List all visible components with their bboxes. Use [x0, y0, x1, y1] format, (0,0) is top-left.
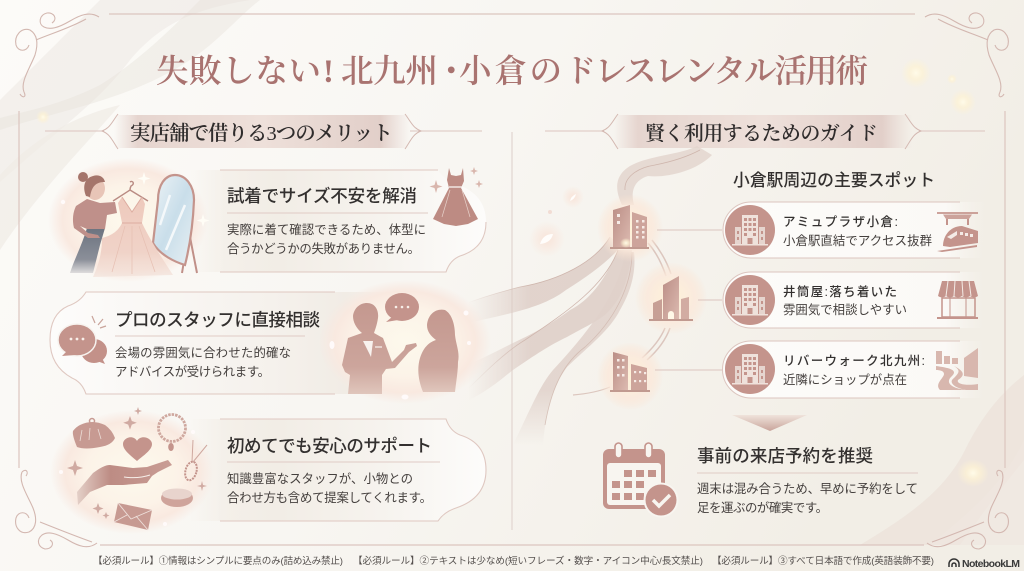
- logo: NotebookLM: NotebookLM: [962, 558, 1020, 570]
- icon: dress: [430, 167, 483, 226]
- heading: main spots: 小倉駅周辺の主要スポット: [733, 171, 935, 190]
- heading: right section: 賢く利用するためのガイド: [645, 122, 878, 145]
- panel: card 3 beginner support: [50, 407, 486, 534]
- spot: Amu Plaza Kokura: 小倉駅直結でアクセス抜群: [783, 233, 932, 248]
- spot: Izutsuya: 井筒屋:落ち着いた: [783, 284, 897, 299]
- heading: left section: 実店舗で借りる3つのメリット: [130, 121, 393, 145]
- icon: building 2: [635, 262, 707, 334]
- illustration: woman with dress and mirror: [48, 158, 210, 282]
- spot: Izutsuya: 雰囲気で相談しやすい: [783, 302, 907, 317]
- title: ドレスレンタル活用術: [564, 53, 868, 90]
- footer rules: 【必須ルール】③すべて日本語で作成(英語装飾不要): [712, 555, 934, 567]
- title: [156, 53, 868, 90]
- text: staff detail: 会場の雰囲気に合わせた的確な: [115, 345, 291, 360]
- icon: river and buildings: [936, 348, 978, 390]
- text: size detail: 実際に着て確認できるため、体型に: [227, 222, 426, 237]
- spot: Izutsuya: [723, 272, 985, 328]
- text: reservation detail: 週末は混み合うため、早めに予約をして: [697, 481, 918, 496]
- text: size detail: [227, 222, 426, 256]
- text: support detail: 合わせ方も含めて提案してくれます。: [227, 490, 432, 505]
- ornament: bottom right corner: [927, 470, 1008, 549]
- text: support detail: [227, 471, 432, 505]
- text: staff detail: アドバイスが受けられます。: [115, 364, 270, 379]
- ornament: top right corner: [925, 13, 1008, 97]
- spot: Riverwalk Kitakyushu: リバーウォーク北九州:: [783, 354, 925, 368]
- panel: card 2 staff consultation: [50, 280, 491, 404]
- title: ・: [435, 54, 468, 90]
- ornament: bottom left corner: [16, 470, 97, 549]
- footer rules: 【必須ルール】②テキストは少なめ(短いフレーズ・数字・アイコン中心/長文禁止): [353, 555, 703, 567]
- heading: right section: [545, 114, 985, 149]
- spot: Riverwalk Kitakyushu: [722, 341, 985, 398]
- ornament: top left corner: [16, 13, 99, 97]
- icon: calendar with check: [603, 443, 678, 518]
- icon: building 3: [597, 342, 663, 410]
- title: 失敗しない: [156, 53, 321, 90]
- illustration: staff and customer: [319, 280, 491, 404]
- illustration: flowing ribbon: [460, 146, 712, 445]
- title: 北九州: [341, 53, 438, 90]
- text: reservation detail: [697, 481, 918, 515]
- spot: Amu Plaza Kokura: [723, 202, 985, 258]
- heading: size: 試着でサイズ不安を解消: [227, 186, 417, 206]
- icon: shop: [937, 281, 978, 319]
- illustration: accessories on a hand: [50, 407, 214, 534]
- text: reservation detail: 足を運ぶのが確実です。: [697, 500, 828, 515]
- text: staff detail: [115, 345, 291, 379]
- heading: support: 初めてでも安心のサポート: [227, 436, 432, 456]
- icon: station and train: [937, 212, 978, 252]
- title: !: [323, 54, 334, 90]
- icon: building 1: [597, 194, 663, 262]
- panel: card 1 try-on: [48, 158, 486, 282]
- background sparkles: [36, 58, 976, 124]
- heading: left section: [45, 114, 482, 149]
- connector lines: [655, 230, 722, 370]
- background veil: bottom right: [860, 375, 1024, 545]
- icon: speech bubbles: [58, 316, 107, 364]
- footer rules: 【必須ルール】①情報はシンプルに要点のみ(詰め込み禁止): [93, 555, 343, 567]
- heading: reservation: 事前の来店予約を推奨: [697, 446, 873, 466]
- text: size detail: 合うかどうかの失敗がありません。: [227, 241, 420, 256]
- footer rules: [93, 555, 934, 567]
- text: support detail: 知識豊富なスタッフが、小物との: [227, 471, 413, 486]
- spot: Riverwalk Kitakyushu: 近隣にショップが点在: [783, 372, 907, 387]
- background veil: top left: [0, 0, 260, 250]
- title: 小倉の: [459, 53, 562, 90]
- heading: staff: プロのスタッフに直接相談: [115, 310, 320, 330]
- arrow: down: [732, 415, 807, 431]
- spot: Amu Plaza Kokura: アミュプラザ小倉:: [783, 214, 898, 229]
